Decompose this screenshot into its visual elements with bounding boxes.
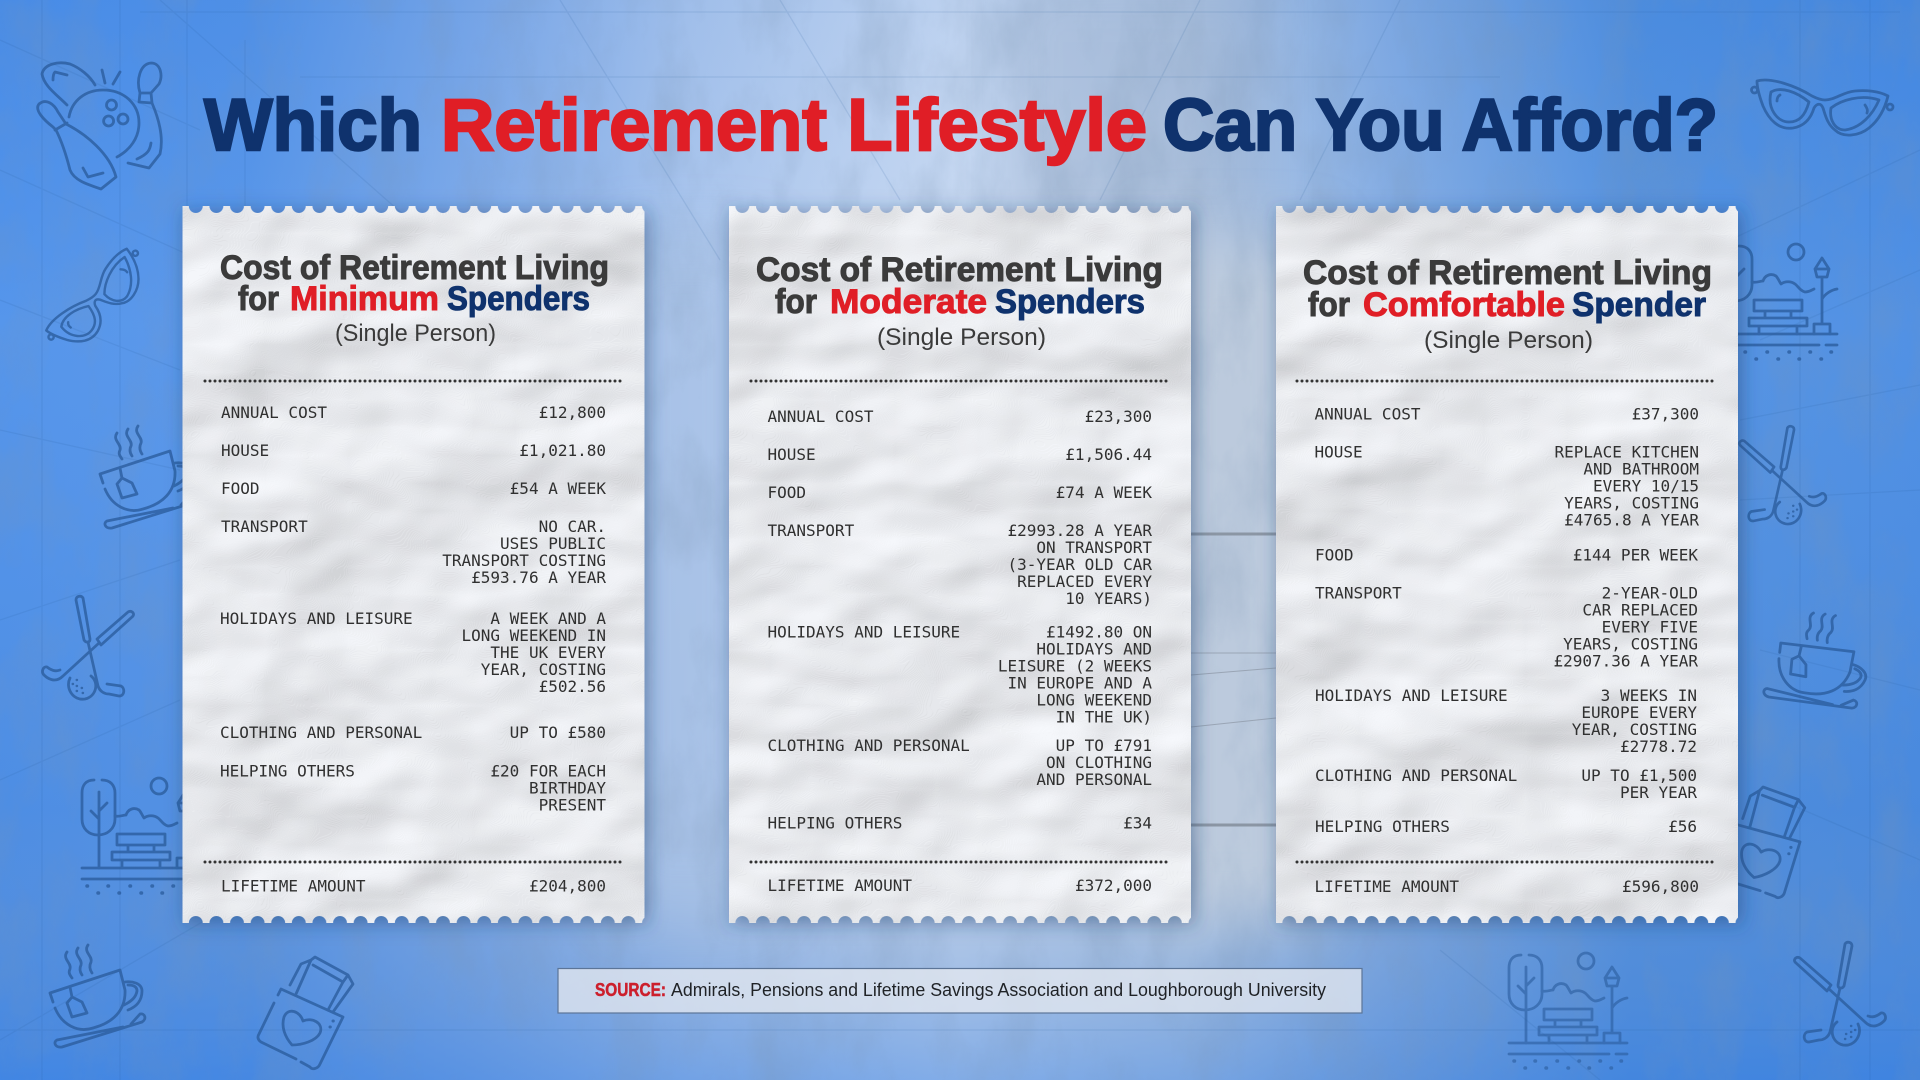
icon: tea cup left xyxy=(100,426,195,528)
heading: minimum spenders: Cost of Retirement Living xyxy=(220,249,609,287)
heading: moderate spenders: for xyxy=(775,283,817,321)
receipt rows: USES PUBLIC xyxy=(500,534,606,553)
receipt rows: EUROPE EVERY xyxy=(1581,703,1697,722)
receipt rows: THE UK EVERY xyxy=(490,643,606,662)
heading: minimum spenders: for xyxy=(238,280,279,318)
receipt rows: £4765.8 A YEAR xyxy=(1564,510,1699,530)
receipt rows: £2778.72 xyxy=(1620,737,1697,756)
dotted divider top xyxy=(205,380,623,382)
receipt rows: FOOD xyxy=(768,483,806,502)
receipt rows: ON TRANSPORT xyxy=(1036,538,1152,557)
receipt rows: YEARS, COSTING xyxy=(1564,494,1699,512)
icon: golf clubs right xyxy=(1739,426,1826,524)
receipt rows: YEARS, COSTING xyxy=(1563,634,1698,654)
receipt rows: £12,800 xyxy=(539,403,606,422)
dotted divider top xyxy=(1297,380,1715,382)
receipt rows: 2-YEAR-OLD xyxy=(1602,584,1698,602)
heading: minimum spenders: Spenders xyxy=(447,280,590,318)
icon: golf clubs bottom right xyxy=(1794,942,1885,1045)
icon: cat-eye glasses top right xyxy=(1752,80,1893,135)
heading: moderate spenders: Moderate xyxy=(830,283,987,321)
receipt rows: NO CAR. xyxy=(539,517,606,536)
heading: minimum spenders: Minimum xyxy=(290,280,439,318)
receipt rows: HOUSE xyxy=(768,445,816,464)
receipt rows: REPLACED EVERY xyxy=(1017,572,1152,591)
receipt rows: TRANSPORT xyxy=(768,521,855,540)
receipt rows: LONG WEEKEND xyxy=(1036,690,1152,710)
icon: shopping bag right xyxy=(1707,781,1818,906)
icon: park bench left xyxy=(82,778,200,893)
receipt rows: HOLIDAYS AND LEISURE xyxy=(220,609,413,628)
receipt rows: YEAR, COSTING xyxy=(481,660,606,679)
receipt rows xyxy=(1314,404,1699,836)
heading: moderate spenders: (Single Person) xyxy=(877,324,1046,351)
lifetime amount: LIFETIME AMOUNT xyxy=(768,876,912,895)
receipt rows: AND PERSONAL xyxy=(1036,770,1152,789)
icon: shopping bag bottom left xyxy=(258,957,353,1069)
icon: tea cup right xyxy=(1758,599,1887,732)
title: Can You Afford? xyxy=(1163,85,1718,166)
heading: comfortable spender: (Single Person) xyxy=(1424,327,1593,354)
icon: golf clubs left xyxy=(43,596,134,699)
heading: comfortable spender: Cost of Retirement Living xyxy=(1303,254,1712,292)
receipt rows: £1,506.44 xyxy=(1065,445,1152,464)
receipt rows: UP TO £1,500 xyxy=(1581,766,1697,785)
lifetime amount xyxy=(768,876,1152,895)
receipt rows: HOLIDAYS AND LEISURE xyxy=(768,622,960,642)
receipt rows: LONG WEEKEND IN xyxy=(462,626,606,645)
title xyxy=(204,85,1718,166)
heading: moderate spenders xyxy=(756,251,1163,351)
receipt rows: EVERY FIVE xyxy=(1602,618,1698,636)
lifetime amount: £596,800 xyxy=(1622,877,1699,896)
receipt rows: £56 xyxy=(1668,817,1697,836)
panel: minimum spenders receipt xyxy=(182,206,644,923)
receipt rows: AND BATHROOM xyxy=(1583,460,1699,478)
receipt rows: TRANSPORT xyxy=(221,517,308,536)
dotted divider bottom xyxy=(1297,860,1715,864)
receipt rows: £54 A WEEK xyxy=(510,479,606,498)
heading: comfortable spender xyxy=(1303,254,1712,354)
receipt rows: BIRTHDAY xyxy=(529,778,606,798)
receipt rows: £2907.36 A YEAR xyxy=(1554,652,1698,670)
lifetime amount xyxy=(1314,877,1699,896)
icon: tea cup bottom left xyxy=(50,945,145,1047)
icon: park bench right xyxy=(1719,244,1837,359)
lifetime amount: LIFETIME AMOUNT xyxy=(1314,877,1459,896)
receipt rows xyxy=(220,403,606,814)
receipt rows: £1,021.80 xyxy=(519,441,606,460)
dotted divider bottom xyxy=(751,860,1169,864)
source box: SOURCE: xyxy=(595,980,666,1000)
lifetime amount: £204,800 xyxy=(529,876,606,896)
heading: minimum spenders xyxy=(220,249,609,347)
icon: glasses left xyxy=(43,237,156,363)
receipt rows: REPLACE KITCHEN xyxy=(1554,442,1699,462)
heading: comfortable spender: Spender xyxy=(1572,286,1706,324)
receipt rows: £74 A WEEK xyxy=(1056,483,1152,502)
receipt rows: ANNUAL COST xyxy=(221,403,327,422)
receipt rows: HOLIDAYS AND xyxy=(1036,640,1152,658)
heading: moderate spenders: Spenders xyxy=(995,283,1145,321)
receipt rows: HOLIDAYS AND LEISURE xyxy=(1315,686,1508,705)
receipt rows: (3-YEAR OLD CAR xyxy=(1008,555,1152,574)
receipt rows: UP TO £580 xyxy=(510,723,606,742)
receipt rows: 3 WEEKS IN xyxy=(1601,686,1697,705)
heading: comfortable spender: for xyxy=(1308,286,1350,324)
panel: comfortable spender receipt xyxy=(1276,206,1738,923)
dotted divider bottom xyxy=(205,860,623,864)
receipt rows: LEISURE (2 WEEKS xyxy=(998,656,1152,676)
receipt rows: A WEEK AND A xyxy=(490,609,606,628)
receipt rows: HOUSE xyxy=(221,441,269,460)
receipt rows: TRANSPORT xyxy=(1315,584,1402,602)
receipt rows: CLOTHING AND PERSONAL xyxy=(768,736,970,755)
receipt rows: £20 FOR EACH xyxy=(490,762,606,780)
receipt rows: EVERY 10/15 xyxy=(1593,476,1699,496)
receipt rows: £593.76 A YEAR xyxy=(471,568,606,587)
receipt rows: HELPING OTHERS xyxy=(220,762,355,780)
receipt rows: CLOTHING AND PERSONAL xyxy=(1315,766,1517,785)
receipt rows: IN EUROPE AND A xyxy=(1008,674,1152,692)
lifetime amount: £372,000 xyxy=(1075,876,1152,895)
heading: comfortable spender: Comfortable xyxy=(1363,286,1565,324)
receipt rows: £34 xyxy=(1123,814,1152,832)
receipt rows: 10 YEARS) xyxy=(1065,589,1152,608)
icon: park bench bottom xyxy=(1509,953,1627,1068)
receipt rows: PRESENT xyxy=(539,796,606,814)
receipt rows: £144 PER WEEK xyxy=(1573,546,1698,564)
receipt rows: CLOTHING AND PERSONAL xyxy=(220,723,422,742)
receipt rows: ON CLOTHING xyxy=(1046,753,1152,772)
receipt rows: FOOD xyxy=(221,479,260,498)
receipt rows: £1492.80 ON xyxy=(1046,622,1152,642)
heading: minimum spenders: (Single Person) xyxy=(335,320,496,347)
receipt rows: £2993.28 A YEAR xyxy=(1008,521,1152,540)
lifetime amount: LIFETIME AMOUNT xyxy=(221,876,366,896)
icon: bowling ball and pins xyxy=(38,63,161,189)
receipt rows xyxy=(768,407,1152,832)
title: Retirement Lifestyle xyxy=(441,85,1147,166)
receipt rows: £502.56 xyxy=(539,677,606,696)
receipt rows: FOOD xyxy=(1315,546,1354,564)
receipt rows: HELPING OTHERS xyxy=(1315,817,1450,836)
heading: moderate spenders: Cost of Retirement Living xyxy=(756,251,1163,289)
panel: moderate spenders receipt xyxy=(729,206,1191,923)
receipt rows: YEAR, COSTING xyxy=(1572,720,1697,739)
receipt rows: ANNUAL COST xyxy=(1314,404,1421,424)
receipt rows: UP TO £791 xyxy=(1056,736,1152,755)
receipt rows: CAR REPLACED xyxy=(1582,600,1698,620)
receipt rows: TRANSPORT COSTING xyxy=(442,551,606,570)
lifetime amount xyxy=(221,876,606,896)
receipt rows: IN THE UK) xyxy=(1056,708,1152,726)
source box: Admirals, Pensions and Lifetime Savings Association and Loughborough University xyxy=(671,980,1326,1000)
dotted divider top xyxy=(751,380,1169,382)
receipt rows: HOUSE xyxy=(1314,442,1363,462)
receipt rows: £23,300 xyxy=(1085,407,1152,426)
receipt rows: PER YEAR xyxy=(1620,783,1697,802)
receipt rows: ANNUAL COST xyxy=(768,407,874,426)
title: Which xyxy=(204,85,422,166)
receipt rows: £37,300 xyxy=(1632,404,1699,424)
receipt rows: HELPING OTHERS xyxy=(768,814,902,832)
source box xyxy=(558,968,1362,1013)
